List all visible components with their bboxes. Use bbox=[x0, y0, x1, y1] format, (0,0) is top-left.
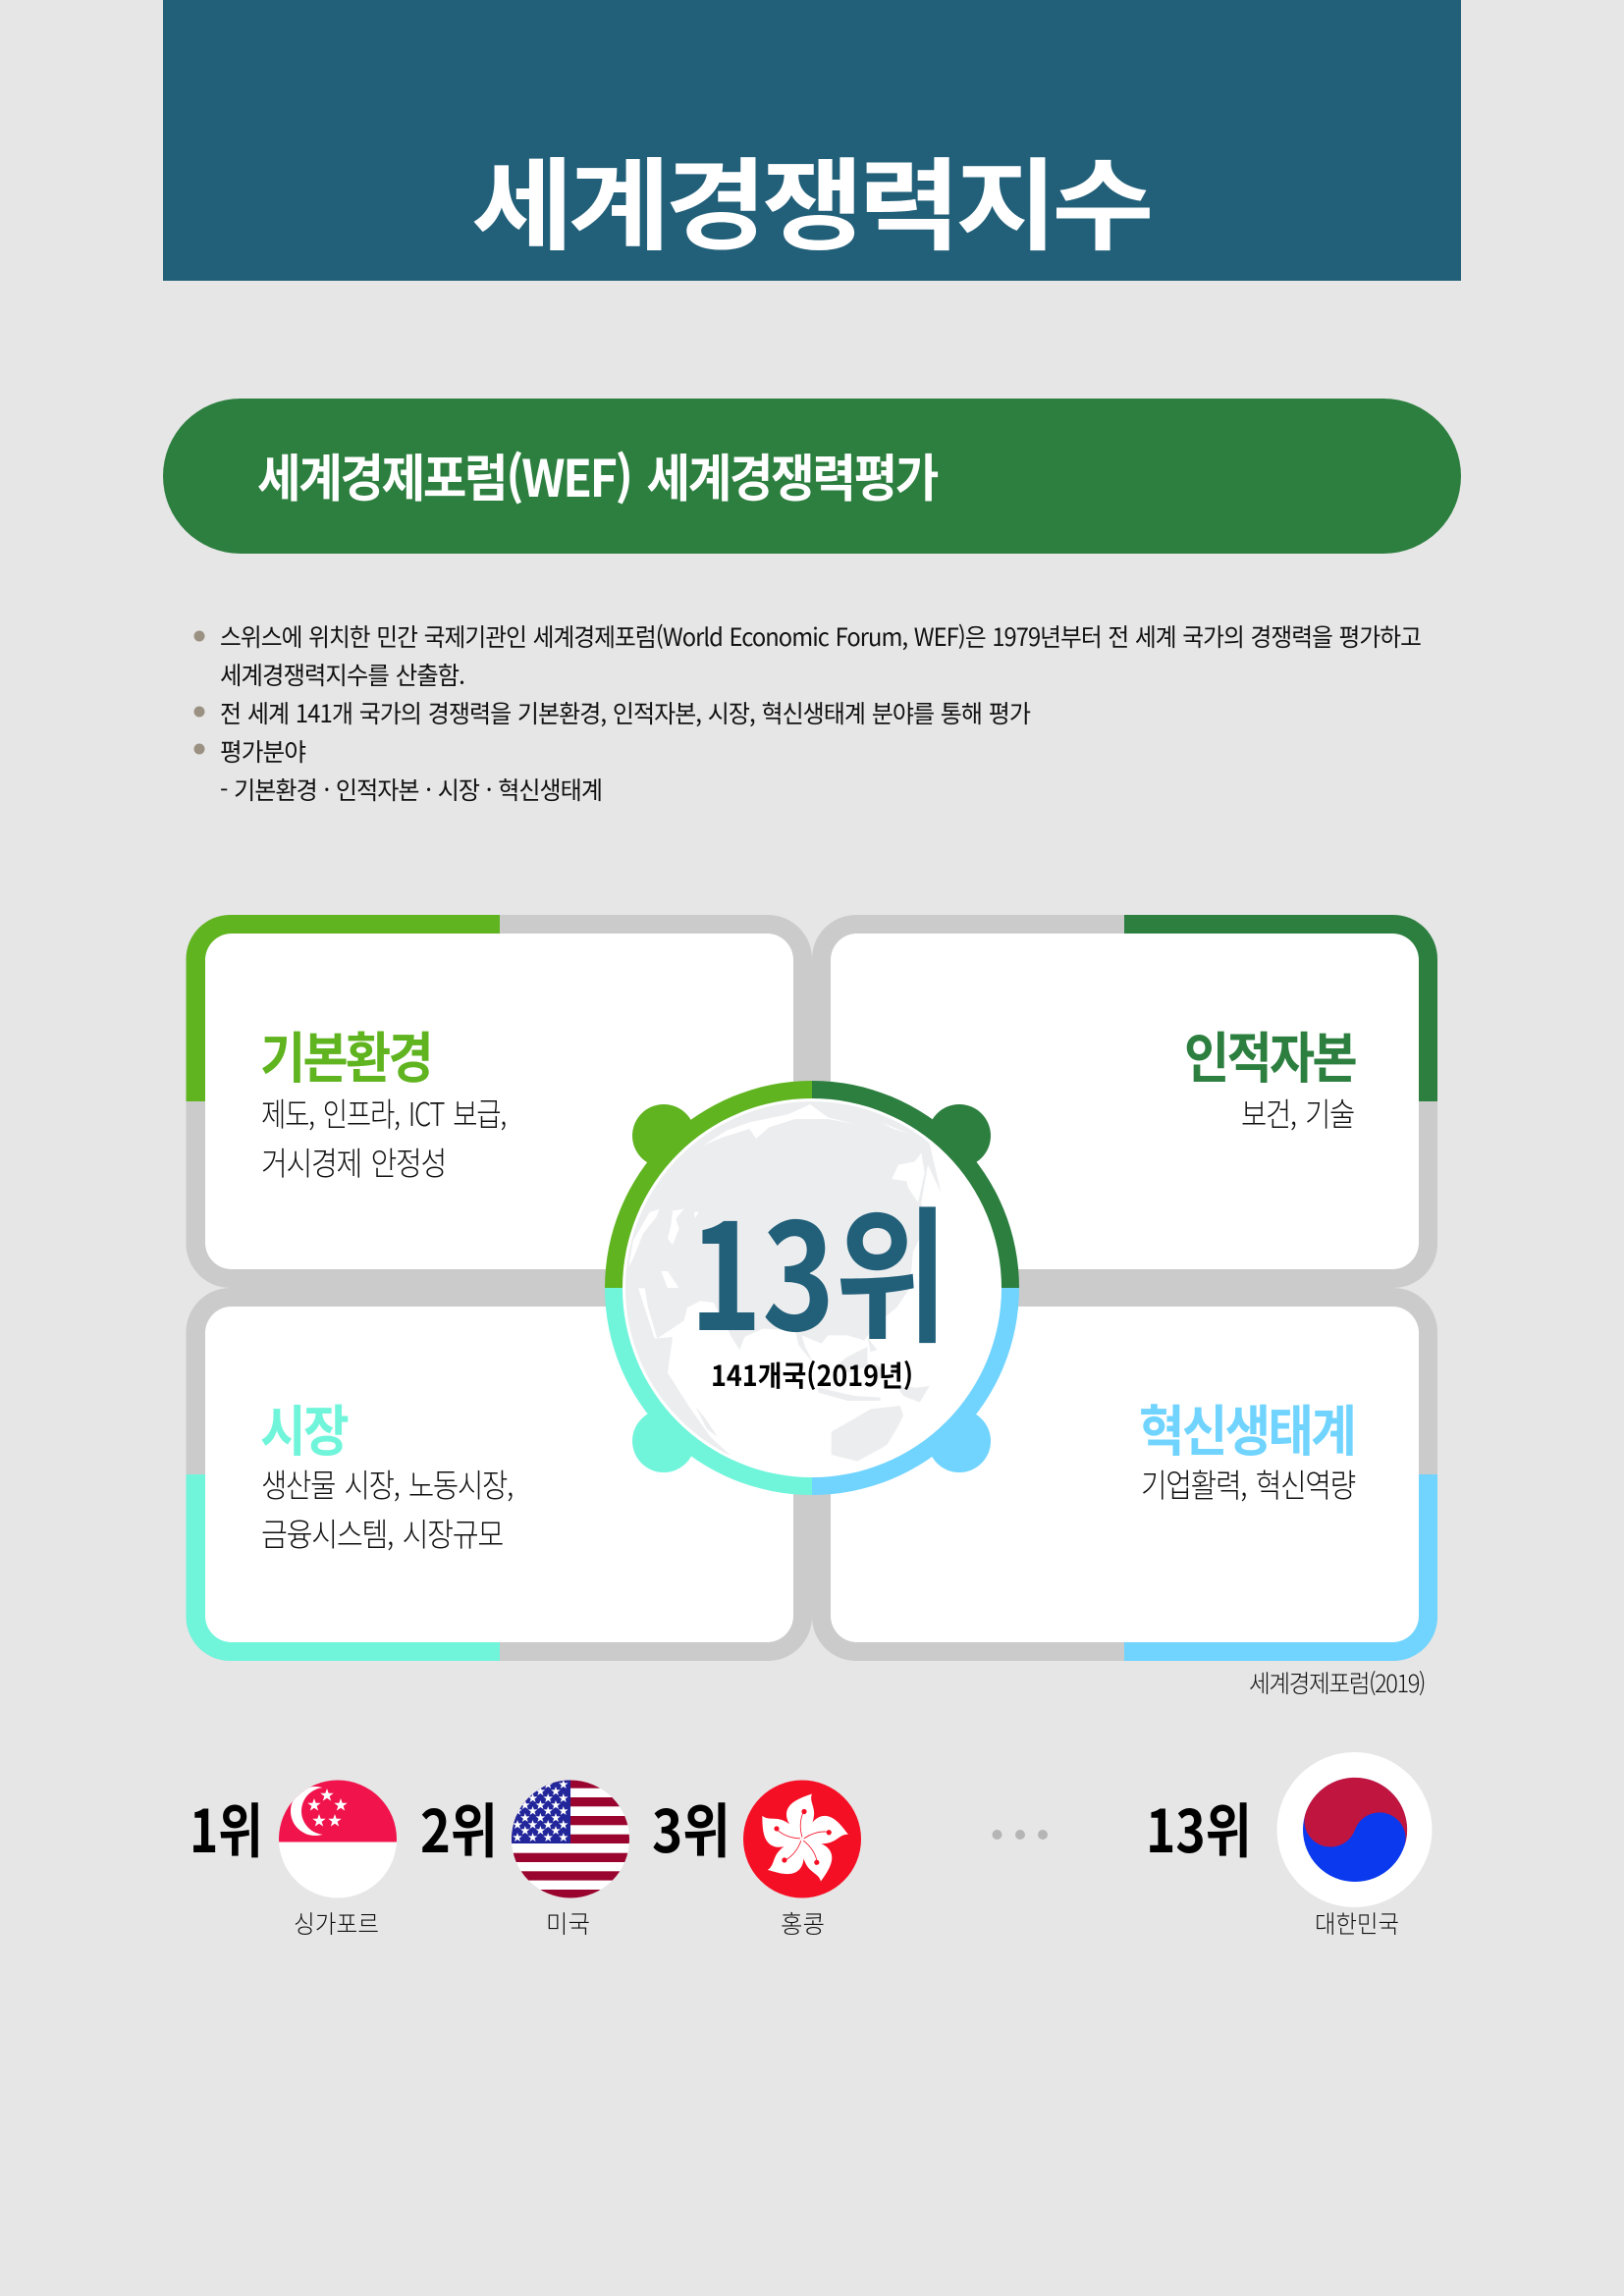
description: 기본환경: 제도, 인프라, ICT 보급, bbox=[261, 1089, 506, 1136]
panel: basic environment card bbox=[187, 915, 812, 1288]
rank 2 usa: 2위 bbox=[420, 1785, 498, 1870]
four colour ring bbox=[605, 1081, 1019, 1495]
description: 시장: 생산물 시장, 노동시장, bbox=[261, 1460, 513, 1507]
big rank 13위: 13위 bbox=[689, 1160, 948, 1373]
description bullet list bbox=[194, 618, 1421, 807]
ellipsis dots bbox=[992, 1830, 1048, 1840]
section heading pill bbox=[163, 399, 1461, 554]
panel: market card bbox=[187, 1288, 812, 1661]
description: 시장 bbox=[261, 1460, 513, 1556]
sub label: 141개국(2019년) bbox=[711, 1354, 913, 1395]
center ranking badge bbox=[602, 1078, 1019, 1495]
bullet 3 bbox=[194, 733, 602, 807]
bullet 1: 세계경쟁력지수를 산출함. bbox=[220, 657, 464, 692]
icon: hong kong flag bbox=[743, 1781, 861, 1898]
panel: human capital card bbox=[812, 915, 1437, 1288]
globe map bbox=[625, 1101, 941, 1461]
rank 2 usa bbox=[420, 1780, 629, 1941]
label: 미국 bbox=[546, 1905, 590, 1941]
label: 싱가포르 bbox=[294, 1905, 379, 1941]
rank 13 korea: 13위 bbox=[1146, 1785, 1252, 1870]
description: 기본환경 bbox=[261, 1089, 506, 1185]
rank 1 singapore bbox=[189, 1780, 397, 1941]
section heading text: 세계경제포럼(WEF) 세계경쟁력평가 bbox=[257, 438, 939, 511]
title: 세계경쟁력지수 bbox=[471, 127, 1150, 271]
icon: singapore flag bbox=[279, 1780, 397, 1898]
bullet 3: 평가분야 bbox=[220, 733, 306, 769]
bullet 3: - 기본환경 · 인적자본 · 시장 · 혁신생태계 bbox=[220, 772, 602, 807]
bullet 1 bbox=[194, 618, 1421, 692]
rank 13 korea bbox=[1146, 1752, 1432, 1941]
icon: usa flag bbox=[512, 1780, 629, 1898]
knobs bbox=[632, 1104, 991, 1472]
heading: 시장: 시장 bbox=[260, 1388, 348, 1468]
bullet 1: 스위스에 위치한 민간 국제기관인 세계경제포럼(World Economic Forum, WEF)은 1979년부터 전 세계 국가의 경쟁력을 평가하고 bbox=[220, 618, 1421, 654]
description: 기본환경: 거시경제 안정성 bbox=[261, 1138, 446, 1185]
label: 대한민국 bbox=[1315, 1905, 1399, 1941]
label: 홍콩 bbox=[781, 1905, 825, 1941]
icon: korea taegeuk bbox=[1276, 1752, 1432, 1907]
panel: innovation ecosystem card bbox=[812, 1288, 1437, 1661]
heading: 기본환경: 기본환경 bbox=[260, 1015, 431, 1095]
description: 혁신생태계: 기업활력, 혁신역량 bbox=[1141, 1460, 1356, 1507]
header banner bbox=[163, 0, 1461, 281]
bullet 2: 전 세계 141개 국가의 경쟁력을 기본환경, 인적자본, 시장, 혁신생태계 분야를 통해 평가 bbox=[220, 695, 1031, 730]
description: 시장: 금융시스템, 시장규모 bbox=[261, 1509, 503, 1556]
description: 인적자본: 보건, 기술 bbox=[1241, 1089, 1354, 1136]
source note: 세계경제포럼(2019) bbox=[1249, 1665, 1425, 1700]
heading: 인적자본: 인적자본 bbox=[1184, 1015, 1356, 1095]
rank 3 hong kong: 3위 bbox=[652, 1785, 731, 1870]
heading: 혁신생태계: 혁신생태계 bbox=[1139, 1388, 1354, 1468]
rank 3 hong kong bbox=[652, 1781, 861, 1941]
rank 1 singapore: 1위 bbox=[189, 1785, 263, 1870]
